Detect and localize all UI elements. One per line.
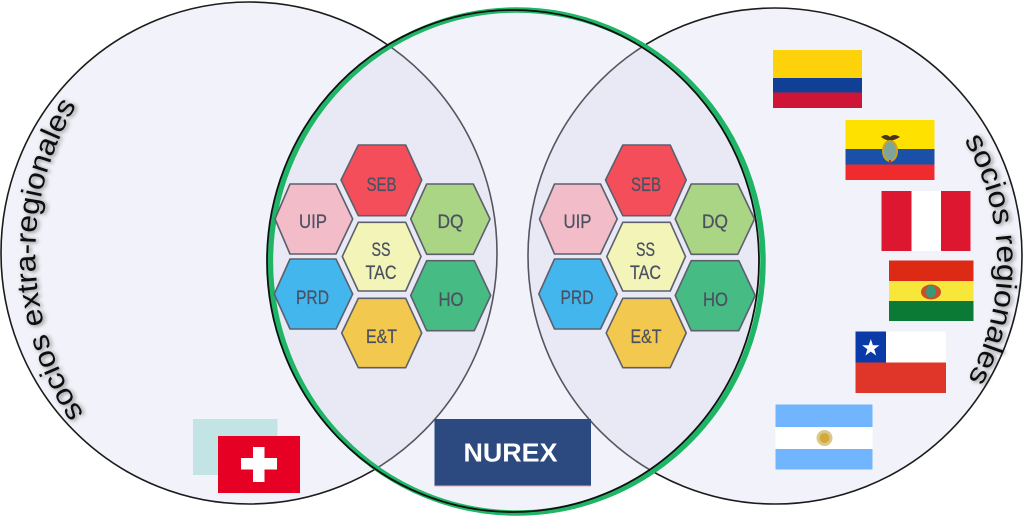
flag: Colombia: [773, 50, 862, 108]
hexagon: UIP: UIP: [564, 212, 592, 233]
panel: right circle: [528, 8, 1022, 504]
hexagon: E&T: [606, 298, 686, 368]
hexagon: SEB: SEB: [366, 175, 396, 196]
hexagon: HO: [411, 261, 491, 331]
hexagon: SS TAC: [342, 222, 421, 291]
panel: central circle: [267, 10, 759, 512]
flag: Switzerland: [218, 436, 300, 493]
hexagon: SEB: [606, 145, 686, 216]
hexagon: UIP: [540, 184, 617, 254]
hexagon: SS TAC: TAC: [630, 263, 661, 284]
hexagon: HO: [675, 261, 755, 331]
label: socios regionales: socios regionales: [966, 134, 1022, 387]
hexagon: HO: HO: [438, 290, 464, 311]
label: socios extra-regionales: socios extra-regionales: [18, 99, 86, 423]
hexagon: SS TAC: [607, 222, 686, 291]
hexagon: E&T: [342, 298, 422, 368]
flag: Argentina: [776, 404, 872, 470]
hexagon: HO: HO: [703, 290, 728, 311]
NUREX badge: NUREX: [464, 440, 558, 468]
NUREX badge: [434, 419, 591, 486]
panel: left circle: [1, 2, 497, 504]
hexagon: E&T: E&T: [630, 327, 662, 348]
hexagon: SS TAC: SS: [372, 240, 390, 261]
hexagon: DQ: DQ: [438, 212, 464, 233]
flag: Ecuador: [846, 120, 934, 180]
flag: Bolivia: [889, 260, 974, 321]
hexagon: UIP: [275, 184, 353, 254]
flag: Peru: [882, 191, 970, 251]
hexagon: PRD: [274, 259, 353, 329]
hexagon: DQ: [411, 184, 490, 254]
hexagon group: right: [539, 145, 755, 368]
hexagon: PRD: PRD: [296, 288, 329, 309]
panel: left overlap lens: [274, 48, 498, 468]
hexagon: SEB: [341, 145, 422, 216]
pale square behind Swiss flag: [193, 419, 278, 475]
hexagon: DQ: [675, 184, 754, 254]
central circle green ring: [270, 10, 763, 513]
hexagon: SEB: SEB: [631, 175, 661, 196]
hexagon: E&T: E&T: [366, 327, 397, 348]
hexagon: SS TAC: SS: [636, 240, 655, 261]
central circle dark outline: [267, 10, 759, 512]
hexagon: PRD: [539, 259, 617, 329]
hexagon: DQ: DQ: [702, 212, 728, 233]
hexagon: PRD: PRD: [560, 288, 594, 309]
panel: right overlap lens: [527, 47, 758, 470]
hexagon: SS TAC: TAC: [366, 263, 396, 284]
hexagon group: left: [274, 145, 491, 368]
hexagon: UIP: UIP: [299, 212, 327, 233]
flag: Chile: [856, 332, 946, 393]
